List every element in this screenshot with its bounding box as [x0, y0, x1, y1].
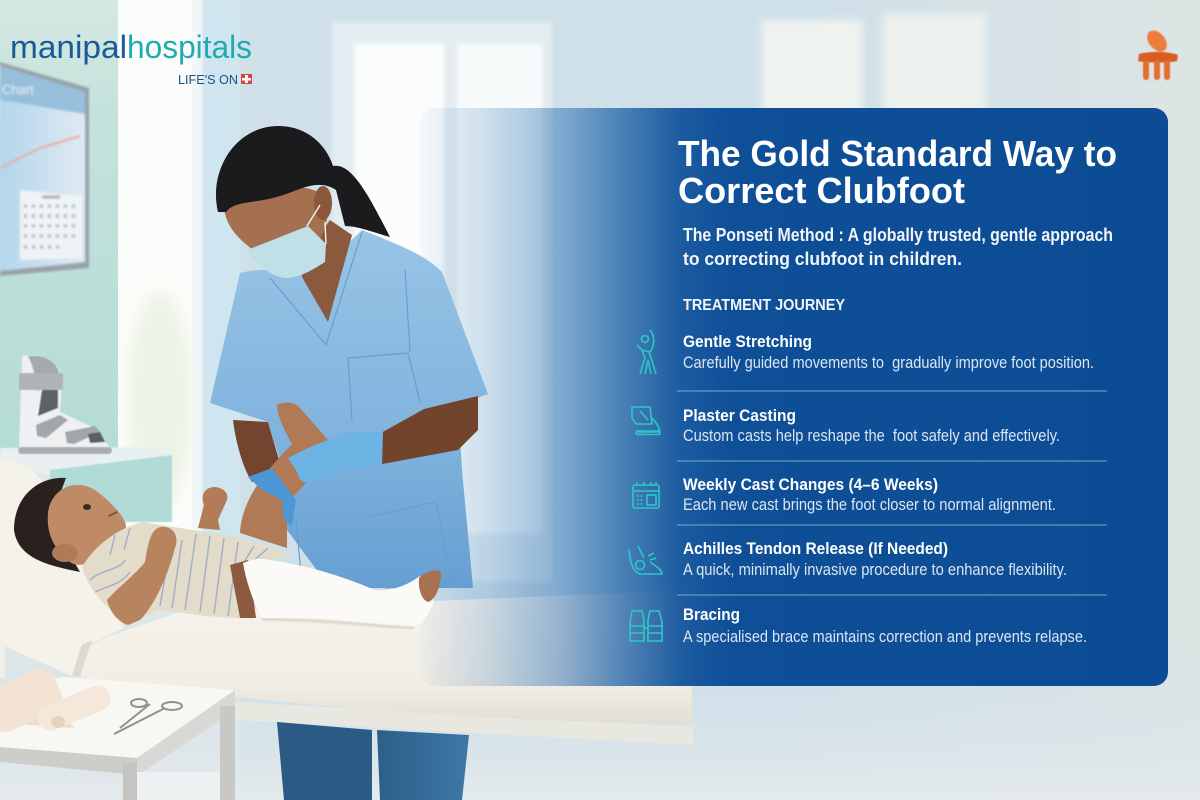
face: [48, 485, 128, 565]
step: bracing: [630, 605, 1087, 646]
logo: Manipal Hospitals: hospitals: [127, 29, 252, 65]
icon: tendon foot: [629, 546, 662, 574]
toes: [419, 570, 441, 602]
leg cast: [243, 559, 434, 627]
icon: orange emblem: [1138, 27, 1178, 80]
step: weekly cast changes: Each new cast brings the foot closer to normal alignment.: [683, 495, 1056, 514]
step: plaster casting: Plaster Casting: [683, 406, 796, 425]
intro text: to correcting clubfoot in children.: [683, 249, 962, 269]
step: weekly cast changes: [633, 475, 1056, 514]
logo: Manipal Hospitals: LIFE'S ON: [178, 72, 238, 87]
step: weekly cast changes: Weekly Cast Changes (4–6 Weeks): [683, 475, 938, 494]
step: gentle stretching: Gentle Stretching: [683, 332, 812, 351]
icon: brace: [630, 611, 662, 641]
ear: [314, 186, 332, 220]
step: achilles tendon release: A quick, minimally invasive procedure to enhance flexibility.: [683, 560, 1067, 579]
scrub top: [210, 230, 488, 588]
step: plaster casting: [632, 406, 1060, 445]
icon: calendar: [633, 482, 659, 508]
face: [224, 186, 328, 265]
step: achilles tendon release: [629, 539, 1067, 579]
step: gentle stretching: [637, 330, 1094, 374]
surgical mask: [247, 226, 326, 278]
step: bracing: A specialised brace maintains correction and prevents relapse.: [683, 627, 1087, 646]
glove on raised leg: [288, 432, 383, 482]
intro text: The Ponseti Method : A globally trusted, gentle approach: [683, 225, 1113, 245]
wall monitor with chart and calendar: Chart: [2, 82, 34, 97]
onesie: [82, 522, 290, 625]
step: achilles tendon release: Achilles Tendon Release (If Needed): [683, 539, 948, 558]
icon: casting: [632, 407, 660, 434]
title: [678, 133, 1117, 211]
baby: [14, 403, 441, 628]
thigh above cast: [230, 560, 256, 618]
intro text: [683, 225, 1113, 269]
ear: [52, 544, 78, 562]
onesie stripes: [90, 528, 268, 616]
nurse left arm: [233, 420, 282, 482]
medical walking boot on shelf: [0, 355, 172, 522]
logo: Manipal Hospitals: [10, 29, 252, 87]
nurse: [210, 126, 488, 800]
raised leg: [240, 403, 330, 548]
nurse trousers: [277, 722, 469, 800]
section heading: treatment journey: TREATMENT JOURNEY: [683, 297, 845, 314]
gradient blue content panel: [420, 108, 1168, 686]
raised arm: [198, 487, 227, 530]
hair and ponytail: [216, 126, 390, 237]
logo: Manipal Hospitals: manipal: [10, 29, 127, 65]
head hair: [14, 478, 80, 572]
eye and mouth: [83, 504, 118, 517]
icon: stretching figure: [637, 330, 656, 374]
supporting glove back: [248, 468, 296, 526]
cast shadow: [262, 619, 414, 628]
step: bracing: Bracing: [683, 605, 740, 624]
title: The Gold Standard Way to: [678, 133, 1117, 174]
right forearm: [381, 396, 478, 464]
side table with bandages and scissors: [0, 640, 235, 800]
neck and chest: [300, 220, 352, 322]
exam bed: [0, 458, 693, 745]
arm on chest: [107, 527, 177, 625]
step: plaster casting: Custom casts help reshape the foot safely and effectively.: [683, 426, 1060, 445]
scissors: [114, 699, 182, 734]
wall monitor with chart and calendar: [0, 62, 89, 276]
title: Correct Clubfoot: [678, 170, 965, 211]
scrub details: [270, 232, 452, 588]
step: gentle stretching: Carefully guided movements to gradually improve foot position.: [683, 353, 1094, 372]
bandage rolls: [0, 640, 114, 737]
